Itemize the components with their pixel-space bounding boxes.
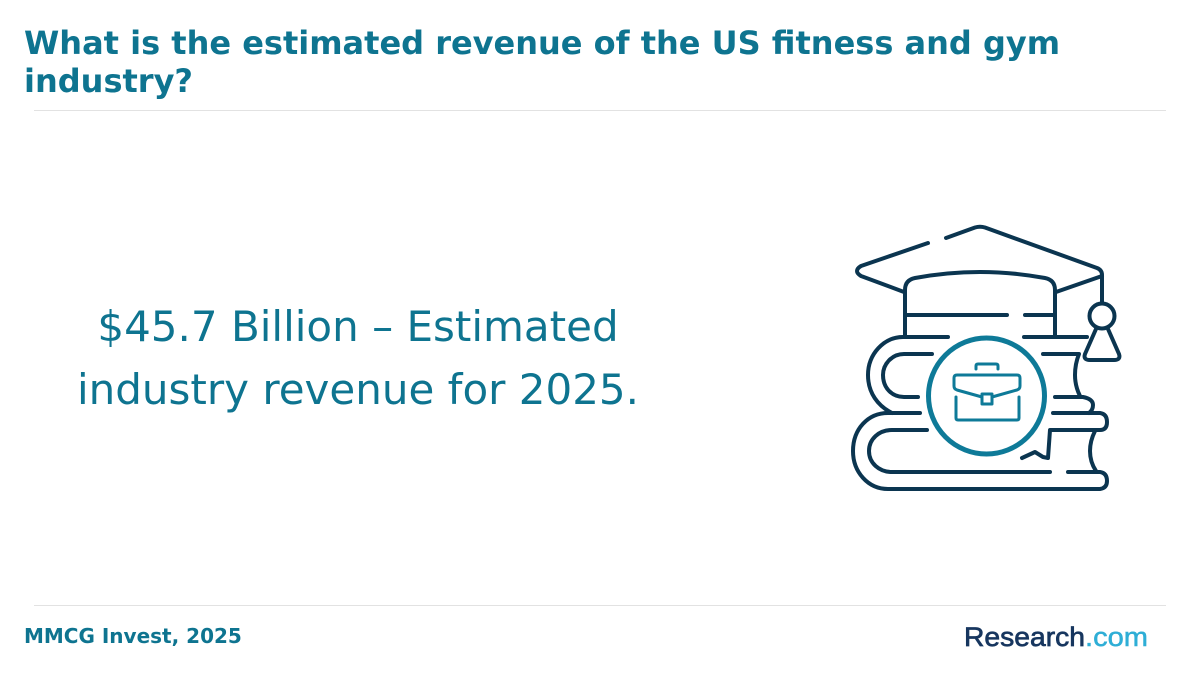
logo: Research.com: Research: [964, 622, 1085, 652]
icon: briefcase badge: [928, 338, 1044, 454]
logo: Research.com: .com: [1085, 622, 1148, 652]
logo: Research.com: [964, 622, 1148, 652]
title: What is the estimated revenue of the US fitness and gym industry?: [24, 24, 1060, 100]
icon: stacked books: [853, 337, 1107, 489]
source: MMCG Invest, 2025: [24, 624, 242, 648]
icon: graduation cap: [857, 227, 1119, 360]
main statistic text: $45.7 Billion – Estimated industry revenue for 2025.: [77, 302, 639, 414]
